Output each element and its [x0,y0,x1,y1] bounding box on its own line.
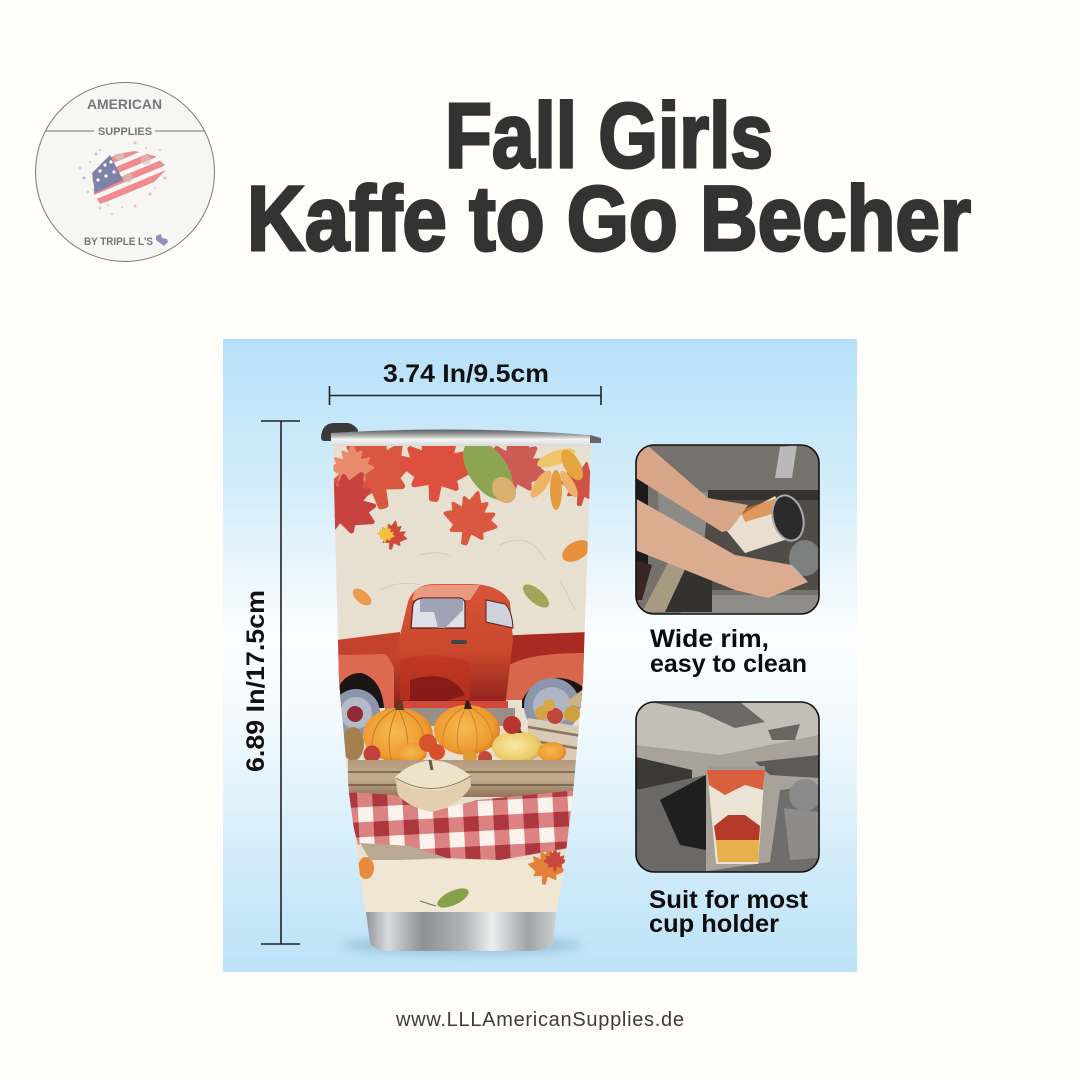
scattered leaves [350,486,593,912]
top leaf cluster [334,446,590,534]
checked cloth [345,790,578,860]
caption: Suit for most [649,886,809,914]
feature card: wide rim [635,445,821,678]
rear wheel [524,678,580,726]
title [247,85,971,270]
caption: Wide rim, [650,625,769,653]
logo icon: small state mark [156,234,168,246]
website footer: www.LLLAmericanSupplies.de [395,1009,684,1031]
logo text: Supplies: SUPPLIES [98,126,152,138]
truck windows [411,598,465,628]
caption: cup holder [649,910,779,938]
photo: tumbler in car cup holder [636,702,821,872]
width dimension: 3.74 In/9.5cm [383,360,549,388]
caption: easy to clean [650,650,807,678]
product panel [223,339,857,972]
title line 2: Kaffe to Go Becher [247,168,971,270]
truck cab [394,584,513,708]
front wheel [340,689,380,736]
tumbler in sink [726,496,785,553]
wheel arches [337,673,384,708]
wood shelf [348,760,580,797]
truck bed [510,632,585,700]
steel base [365,905,557,951]
tumbler shadow [342,936,582,954]
truck [332,584,590,737]
wood crate with apples [528,690,582,760]
tumbler lid [321,423,601,446]
truck hood and fender [337,632,400,708]
height dimension: 6.89 In/17.5cm [242,590,270,772]
tumbler body artwork [333,446,591,912]
title line 1: Fall Girls [445,85,773,187]
pumpkins [363,700,566,765]
width dimension [329,360,601,405]
beige pumpkin in basket [395,760,471,812]
logo badge [36,82,214,262]
caption [649,886,809,938]
photo: washing tumbler at sink [635,445,821,614]
arms [636,445,748,532]
caption [650,625,807,678]
infographic canvas [35,82,972,1030]
feature card: cup holder [636,702,821,938]
logo icon: distressed flag [79,142,166,215]
height dimension [242,421,300,944]
tumbler [300,420,607,954]
small tumbler [707,768,765,864]
truck door handle [451,640,467,644]
logo text: American: AMERICAN [87,96,162,112]
logo text: by Triple L's: BY TRIPLE L'S [84,236,153,248]
gourd at left [342,727,364,761]
